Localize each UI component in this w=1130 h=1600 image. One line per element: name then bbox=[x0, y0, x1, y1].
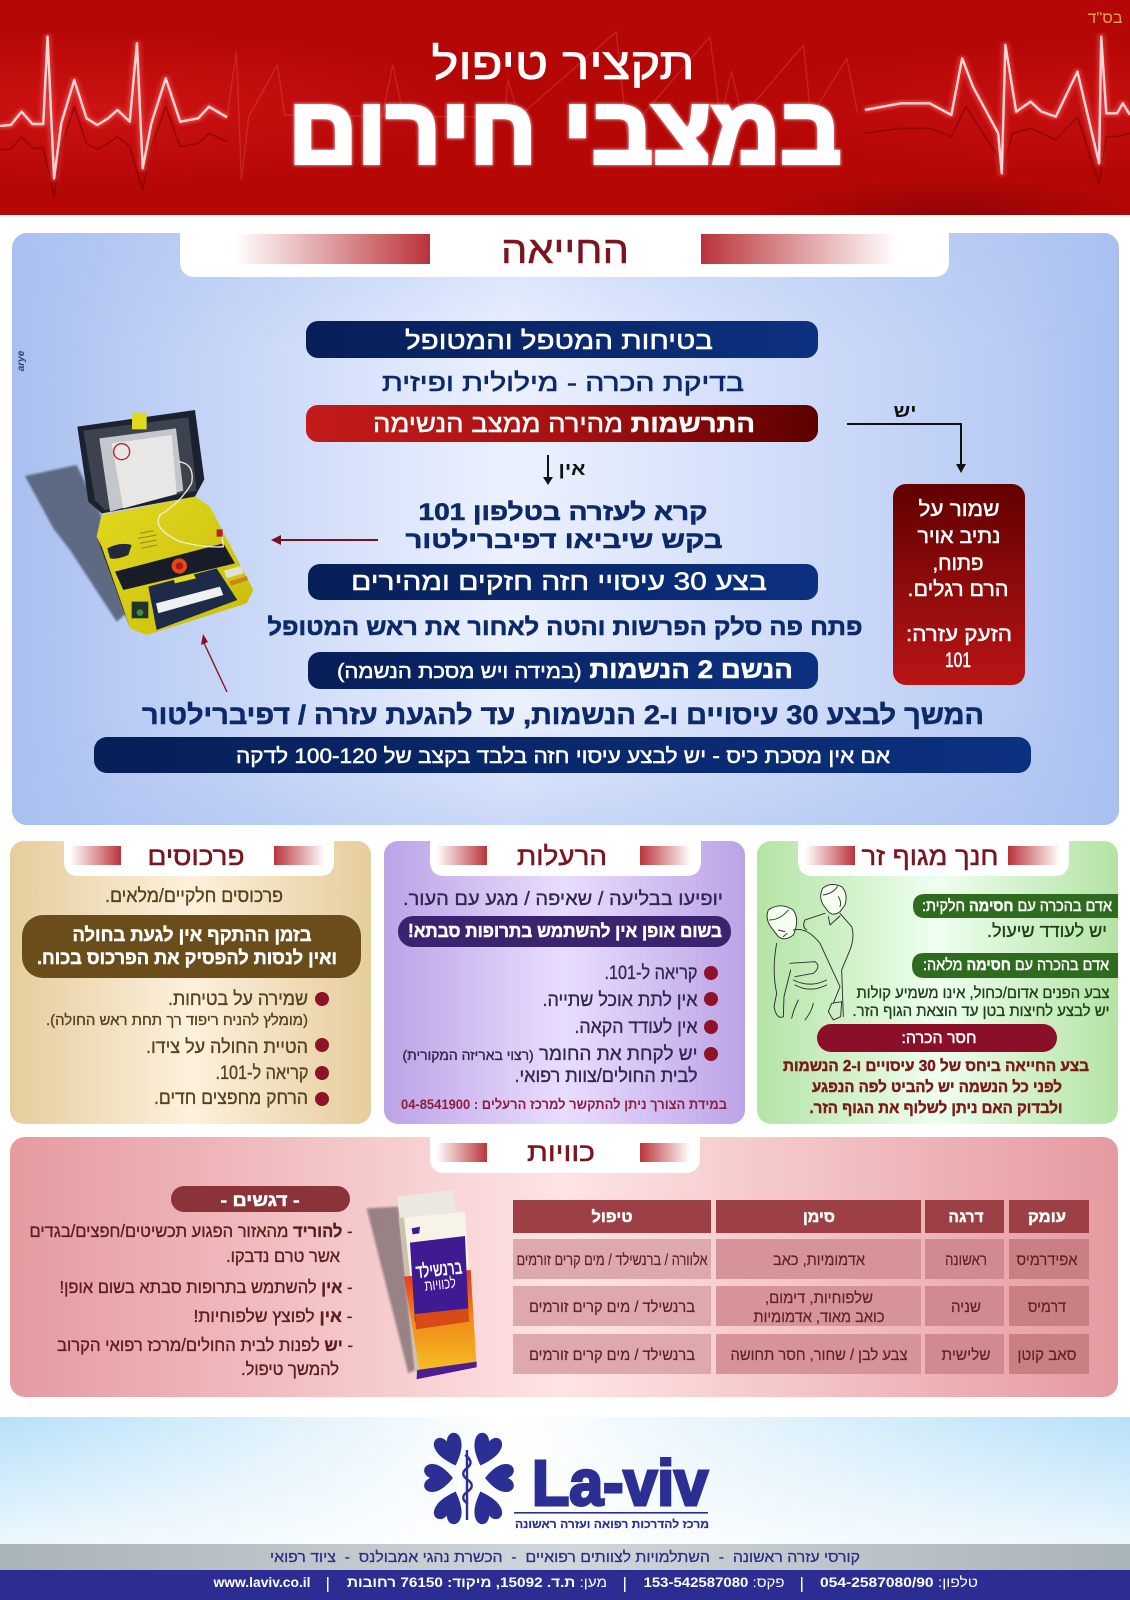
notes list: להמשך טיפול. bbox=[241, 1359, 339, 1379]
unconscious label bbox=[817, 1024, 1057, 1052]
row: first degree: אלוורה / ברנשילד / מים קרים זורמים bbox=[516, 1251, 708, 1269]
step: call for help: קרא לעזרה בטלפון 101 bbox=[418, 499, 708, 526]
step: compressions: בצע 30 עיסויי חזה חזקים ומהירים bbox=[351, 568, 767, 596]
notes list: אשר טרם נדבקו. bbox=[226, 1246, 340, 1266]
step: breaths: הנשם 2 הנשמות (במידה ויש מסכת הנשמה) bbox=[337, 656, 793, 684]
logo: wordmark: La-viv bbox=[532, 1447, 708, 1519]
title line 2: במצבי חירום bbox=[288, 78, 842, 183]
warning box: ואין לנסות להפסיק את הפרכוס בכוח. bbox=[37, 948, 337, 969]
arrow: no branch bbox=[543, 455, 586, 485]
row: second degree: דרמיס bbox=[1028, 1299, 1066, 1316]
row: first degree: ראשונה bbox=[945, 1252, 987, 1269]
burns table bbox=[513, 1200, 1089, 1374]
choking heading tab: חנך מגוף זר bbox=[862, 841, 998, 871]
row: third degree bbox=[513, 1334, 1089, 1374]
partial obstruction action: יש לעודד שיעול. bbox=[987, 921, 1107, 941]
CPR heading tab: החייאה bbox=[501, 230, 629, 272]
header banner bbox=[0, 0, 1130, 215]
full obstruction label bbox=[912, 953, 1118, 978]
seizures heading tab bbox=[64, 841, 334, 876]
footer logo area bbox=[0, 1417, 1130, 1544]
table header bbox=[513, 1200, 1089, 1233]
step: call for help: בקש שיביאו דפיברילטור bbox=[406, 527, 722, 554]
notes list: - אין להשתמש בתרופות סבתא בשום אופן! bbox=[60, 1277, 353, 1297]
intro text: יופיעו בבליעה / שאיפה / מגע עם העור. bbox=[403, 889, 723, 910]
bullet list bbox=[403, 963, 718, 1087]
row: first degree: אפידרמיס bbox=[1016, 1252, 1078, 1269]
box: keep airway open: נתיב אויר bbox=[918, 525, 1000, 548]
bullet list: הטיית החולה על צידו. bbox=[146, 1037, 308, 1058]
blessing mark: בס"ד bbox=[1088, 10, 1123, 27]
notes list: - יש לפנות לבית החולים/מרכז רפואי הקרוב bbox=[57, 1335, 353, 1355]
logo: hearts and staff bbox=[424, 1431, 514, 1526]
row: second degree: שניה bbox=[951, 1299, 981, 1316]
step: safety bbox=[306, 321, 818, 358]
table header: טיפול bbox=[592, 1208, 632, 1226]
bullet list: קריאה ל-101. bbox=[604, 963, 698, 984]
burns heading tab bbox=[430, 1137, 700, 1173]
step: call for help bbox=[406, 499, 722, 554]
arrow: cycle to defibrillator bbox=[201, 634, 227, 692]
warning box bbox=[22, 915, 361, 978]
unconscious instructions: ולבדוק האם ניתן לשלוף את הגוף הזר. bbox=[810, 1099, 1062, 1117]
box: keep airway open bbox=[893, 484, 1025, 685]
step: check consciousness: בדיקת הכרה - מילולית ופיזית bbox=[382, 369, 744, 397]
panel: poisoning bbox=[384, 841, 745, 1124]
illustration: abdominal thrusts bbox=[767, 885, 853, 1020]
panel: CPR bbox=[12, 230, 1119, 825]
step: breaths bbox=[308, 652, 818, 689]
bullet list: קריאה ל-101. bbox=[215, 1063, 308, 1084]
notes list bbox=[30, 1221, 353, 1379]
partial obstruction label: אדם בהכרה עם חסימה חלקית: bbox=[922, 897, 1112, 915]
row: second degree: כואב מאוד, אדמומיות bbox=[754, 1309, 884, 1326]
notes list: - להוריד מהאזור הפגוע תכשיטים/חפצים/בגדים bbox=[30, 1221, 353, 1241]
row: third degree: סאב קוטן bbox=[1018, 1347, 1076, 1364]
bullet list: אין לתת אוכל שתייה. bbox=[542, 990, 698, 1011]
step: no pocket mask bbox=[94, 737, 1031, 773]
bullet list: אין לעודד הקאה. bbox=[574, 1017, 698, 1038]
step: no pocket mask: אם אין מסכת כיס - יש לבצע עיסוי חזה בלבד בקצב של 100-120 לדקה bbox=[236, 745, 890, 768]
contact band: פקס: 153-542587080 bbox=[644, 1574, 784, 1590]
step: compressions bbox=[308, 564, 818, 600]
bullet list: שמירה על בטיחות. bbox=[168, 989, 308, 1010]
bullet list: לבית החולים/צוות רפואי. bbox=[514, 1066, 698, 1087]
bullet list: הרחק מחפצים חדים. bbox=[154, 1088, 308, 1109]
notes list: - אין לפוצץ שלפוחיות! bbox=[194, 1306, 353, 1326]
panel: burns bbox=[10, 1137, 1118, 1397]
arrow: no branch: אין bbox=[558, 459, 586, 479]
contact band: טלפון: 054-2587080/90 bbox=[820, 1574, 978, 1590]
heartbeat line: left bbox=[0, 37, 227, 197]
contact band bbox=[0, 1570, 1130, 1600]
step: breathing impression bbox=[306, 405, 818, 442]
box: keep airway open: הרם רגלים. bbox=[908, 578, 1008, 601]
warning box: בשום אופן אין להשתמש בתרופות סבתא! bbox=[408, 921, 722, 941]
row: third degree: צבע לבן / שחור, חסר תחושה bbox=[730, 1346, 908, 1364]
icon: burn gel box: ברנשילד bbox=[415, 1257, 463, 1283]
panel: seizures bbox=[10, 841, 371, 1124]
icon: defibrillator bbox=[25, 410, 253, 635]
step: breathing impression: התרשמות מהירה ממצב הנשימה bbox=[373, 410, 755, 438]
table header: עומק bbox=[1028, 1209, 1066, 1226]
row: third degree: ברנשילד / מים קרים זורמים bbox=[529, 1346, 695, 1364]
box: keep airway open: 101 bbox=[945, 649, 971, 672]
partial obstruction label bbox=[913, 894, 1118, 918]
panel: choking bbox=[757, 841, 1118, 1124]
notes pill bbox=[171, 1186, 350, 1212]
unconscious instructions bbox=[783, 1057, 1089, 1117]
row: first degree: אדמומיות, כאב bbox=[773, 1252, 865, 1269]
arrow: yes branch: יש bbox=[894, 401, 916, 421]
logo: rule bbox=[514, 1512, 708, 1514]
row: first degree bbox=[513, 1239, 1089, 1279]
row: second degree: ברנשילד / מים קרים זורמים bbox=[529, 1298, 695, 1316]
contact band: www.laviv.co.il bbox=[213, 1574, 310, 1590]
full obstruction label: אדם בהכרה עם חסימה מלאה: bbox=[923, 956, 1109, 974]
warning box: בזמן ההתקף אין לגעת בחולה bbox=[72, 925, 312, 946]
heartbeat line: faint middle bbox=[227, 32, 858, 180]
arrow: to defibrillator bbox=[271, 535, 378, 545]
box: keep airway open: פתוח, bbox=[932, 552, 984, 575]
row: third degree: שלישית bbox=[942, 1346, 990, 1364]
row: second degree: שלפוחיות, דימום, bbox=[765, 1289, 873, 1307]
warning box bbox=[398, 916, 731, 947]
author mark: arye bbox=[16, 350, 27, 371]
unconscious instructions: בצע החייאה ביחס של 30 עיסויים ו-2 הנשמות bbox=[783, 1057, 1089, 1075]
arrow: yes branch bbox=[847, 401, 966, 473]
choking heading tab bbox=[798, 841, 1069, 876]
unconscious label: חסר הכרה: bbox=[902, 1030, 976, 1047]
step: safety: בטיחות המטפל והמטופל bbox=[405, 327, 713, 355]
seizures heading tab: פרכוסים bbox=[148, 841, 244, 871]
title line 1: תקציר טיפול bbox=[432, 40, 694, 89]
step: continue cycle: המשך לבצע 30 עיסויים ו-2 הנשמות, עד להגעת עזרה / דפיברילטור bbox=[142, 700, 984, 730]
full obstruction text: צבע הפנים אדום/כחול, אינו משמיע קולות bbox=[856, 985, 1110, 1002]
full obstruction text bbox=[852, 985, 1110, 1020]
poisoning heading tab bbox=[430, 841, 701, 876]
icon: burn gel box bbox=[367, 1190, 477, 1379]
box: keep airway open: שמור על bbox=[918, 498, 1000, 521]
icon: burn gel box: לכוויות bbox=[424, 1275, 457, 1295]
intro text: פרכוסים חלקיים/מלאים. bbox=[105, 886, 283, 907]
table header: דרגה bbox=[948, 1209, 984, 1226]
bullet list: (מומלץ להניח ריפוד רך תחת ראש החולה). bbox=[46, 1012, 308, 1029]
poison center phone: במידת הצורך ניתן להתקשר למרכז הרעלים : 04-8541900 bbox=[401, 1096, 727, 1112]
poisoning heading tab: הרעלות bbox=[517, 841, 607, 871]
CPR heading tab bbox=[180, 230, 949, 277]
services band: קורסי עזרה ראשונה - השתלמויות לצוותים רפואיים - הכשרת נהגי אמבולנס - ציוד רפואי bbox=[270, 1549, 860, 1566]
unconscious instructions: לפני כל הנשמה יש להביט לפה הנפגע bbox=[812, 1078, 1062, 1096]
row: second degree bbox=[513, 1286, 1089, 1326]
bullet list: יש לקחת את החומר (רצוי באריזה המקורית) bbox=[403, 1044, 698, 1065]
step: open airway: פתח פה סלק הפרשות והטה לאחור את ראש המטופל bbox=[268, 614, 862, 641]
box: keep airway open: הזעק עזרה: bbox=[906, 623, 1012, 646]
bullet list bbox=[46, 989, 329, 1109]
contact band: מען: ת.ד. 15092, מיקוד: 76150 רחובות bbox=[347, 1574, 607, 1590]
table header: סימן bbox=[803, 1209, 835, 1226]
heartbeat line: right bbox=[865, 37, 1130, 183]
notes pill: - דגשים - bbox=[220, 1191, 300, 1210]
title glow: במצבי חירום bbox=[288, 78, 842, 183]
services band bbox=[0, 1544, 1130, 1570]
logo: tagline: מרכז להדרכות רפואה ועזרה ראשונה bbox=[515, 1518, 709, 1531]
full obstruction text: יש לבצע לחיצות בטן עד הוצאת הגוף הזר. bbox=[852, 1003, 1110, 1020]
burns heading tab: כוויות bbox=[527, 1137, 595, 1167]
